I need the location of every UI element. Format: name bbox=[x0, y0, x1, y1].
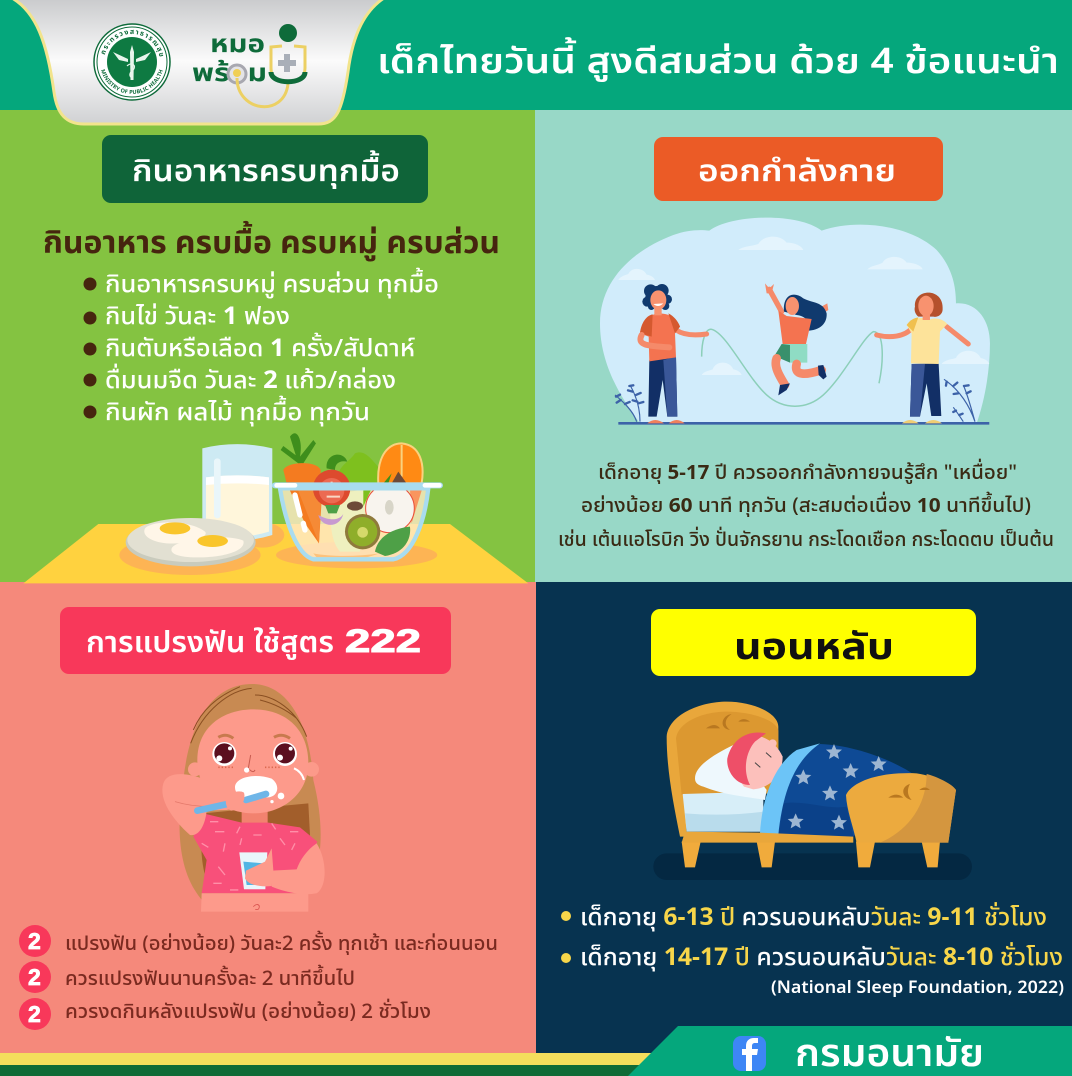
illustration: girl brushing teeth bbox=[162, 684, 325, 912]
logo: หมอพร้อม: พร้อม bbox=[192, 55, 267, 93]
logo: หมอพร้อม: หมอ bbox=[210, 26, 265, 64]
list: sleep guidance: เด็กอายุ 14-17 ปี ควรนอนหลับวันละ 8-10 ชั่วโมง bbox=[580, 940, 1063, 976]
heading: exercise: ออกกำลังกาย bbox=[698, 149, 896, 195]
list: food advice: กินตับหรือเลือด 1 ครั้ง/สัปดาห์ bbox=[105, 331, 415, 367]
list: sleep guidance: เด็กอายุ 6-13 ปี ควรนอนหลับวันละ 9-11 ชั่วโมง bbox=[580, 900, 1047, 936]
list: 222 rule bbox=[19, 925, 498, 1030]
footer tab bbox=[628, 1026, 1072, 1076]
illustration: food on table bbox=[23, 433, 528, 583]
icon: facebook bbox=[733, 1036, 766, 1071]
list: sleep guidance: (National Sleep Foundation, 2022) bbox=[771, 975, 1064, 1001]
footer stripe yellow bbox=[0, 1053, 655, 1065]
illustration: children skipping rope bbox=[600, 218, 990, 423]
list: food advice bbox=[84, 267, 439, 431]
icon: ministry of public health emblem bbox=[93, 23, 171, 101]
text: exercise advice: เช่น เต้นแอโรบิก วิ่ง ปั่นจักรยาน กระโดดเชือก กระโดดตบ เป็นต้น bbox=[558, 525, 1054, 555]
panel: sleep background bbox=[536, 582, 1072, 1076]
text: exercise advice bbox=[558, 458, 1054, 555]
icon: ministry of public health emblem: MINISTRY OF PUBLIC HEALTH bbox=[101, 69, 163, 94]
heading: exercise bbox=[654, 137, 943, 201]
footer stripe green bbox=[0, 1065, 645, 1076]
illustration: child sleeping in bed bbox=[653, 702, 972, 880]
list: food advice: กินไข่ วันละ 1 ฟอง bbox=[105, 299, 290, 335]
list: food advice: กินอาหารครบหมู่ ครบส่วน ทุกมื้อ bbox=[105, 267, 439, 303]
logo tab bbox=[12, 0, 384, 124]
heading: sleep bbox=[651, 609, 976, 676]
heading: food bbox=[102, 135, 428, 203]
list: 222 rule: 2 bbox=[28, 1001, 41, 1027]
heading: tooth brushing: 222 bbox=[345, 623, 421, 659]
list: food advice: ดื่มนมจืด วันละ 2 แก้ว/กล่อง bbox=[105, 363, 396, 399]
list: 222 rule: แปรงฟัน (อย่างน้อย) วันละ2 ครั้ง ทุกเช้า และก่อนนอน bbox=[65, 929, 498, 959]
heading: tooth brushing: การแปรงฟัน ใช้สูตร bbox=[86, 622, 334, 666]
icon: ministry of public health emblem: กระทรวงสาธารณสุข bbox=[102, 30, 164, 56]
heading: sleep: นอนหลับ bbox=[734, 622, 894, 676]
text: exercise advice: เด็กอายุ 5-17 ปี ควรออกกำลังกายจนรู้สึก "เหนื่อย" bbox=[598, 458, 1017, 488]
heading: tooth brushing bbox=[60, 607, 451, 674]
list: 222 rule: ควรงดกินหลังแปรงฟัน (อย่างน้อย) 2 ชั่วโมง bbox=[65, 997, 431, 1027]
panel: exercise background bbox=[535, 108, 1072, 583]
list: 222 rule: 2 bbox=[28, 964, 41, 990]
heading: food: กินอาหารครบทุกมื้อ bbox=[132, 149, 400, 195]
list: 222 rule: ควรแปรงฟันนานครั้งละ 2 นาทีขึ้นไป bbox=[65, 964, 355, 994]
list: sleep guidance bbox=[561, 900, 1064, 1001]
text: exercise advice: อย่างน้อย 60 นาที ทุกวัน (สะสมต่อเนื่อง 10 นาทีขึ้นไป) bbox=[581, 491, 1031, 521]
subheading: food: กินอาหาร ครบมื้อ ครบหมู่ ครบส่วน bbox=[43, 220, 500, 267]
list: food advice: กินผัก ผลไม้ ทุกมื้อ ทุกวัน bbox=[105, 395, 370, 431]
list: 222 rule: 2 bbox=[28, 928, 41, 954]
title: เด็กไทยวันนี้ สูงดีสมส่วน ด้วย 4 ข้อแนะนำ bbox=[377, 36, 1059, 89]
panel: tooth brushing background bbox=[0, 582, 536, 1053]
header band bbox=[0, 0, 1072, 110]
panel: food background bbox=[0, 108, 535, 583]
logo: หมอพร้อม bbox=[192, 24, 305, 107]
